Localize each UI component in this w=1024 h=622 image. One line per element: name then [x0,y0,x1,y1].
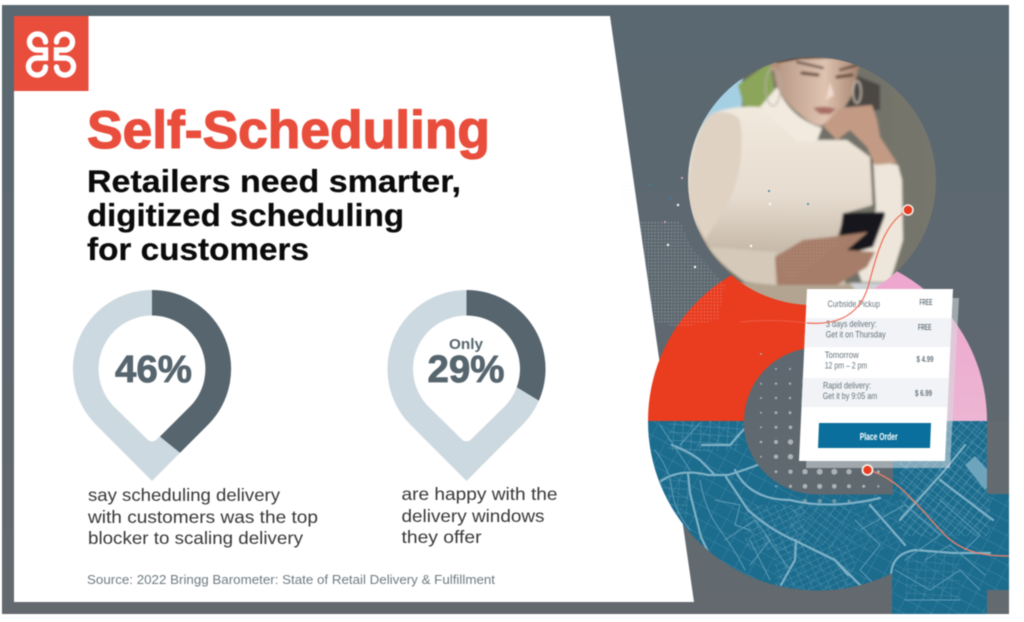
chart: 46% location pin: 46% [115,349,192,391]
subtitle: for customers [87,231,309,267]
text: 29% description [402,484,558,547]
subtitle [87,163,461,267]
logo [14,16,88,91]
delivery options card: Rapid delivery: [823,380,871,392]
chart: 46% location pin [73,290,231,481]
corner blocks [987,421,1009,614]
place order button: Place Order [860,432,898,443]
photo: woman looking at phone [687,56,936,306]
ring: pink segment [872,270,988,422]
delivery options card: Tomorrow [825,350,859,361]
text: 29% description: they offer [402,527,482,547]
source note: Source: 2022 Bringg Barometer: State of Retail Delivery & Fulfillment [87,573,496,587]
delivery options card [799,289,953,461]
delivery options card: 3 days delivery: [826,319,876,330]
subtitle: Retailers need smarter, [87,163,461,199]
subtitle: digitized scheduling [87,197,404,233]
chart: 29% location pin: Only [449,336,484,353]
dot grid [760,353,880,503]
delivery options card: FREE [920,298,933,307]
ring: red segment [647,274,807,422]
delivery options card: 12 pm – 2 pm [825,360,867,372]
text: 46% description [87,485,318,548]
place order button [818,423,931,448]
delivery options card: Get it by 9:05 am [823,391,877,402]
ring inner hole [744,421,893,494]
text: 29% description: delivery windows [402,506,545,526]
card shadow [806,298,959,468]
chart: 29% location pin [387,290,546,481]
delivery route line: upper [740,205,913,323]
delivery options card: Get it on Thursday [826,330,886,341]
text: 46% description: with customers was the top [87,507,318,527]
text: 46% description: say scheduling delivery [88,485,280,505]
title: Self-Scheduling [87,101,490,160]
delivery options card: $ 4.99 [916,355,934,364]
delivery route line: lower [862,465,1009,556]
delivery options card: $ 6.99 [915,389,932,398]
delivery options card: FREE [918,323,932,332]
text: 46% description: blocker to scaling delivery [88,528,303,548]
panel: white content area [14,16,694,602]
delivery options card: Curbside Pickup [828,299,880,310]
city map [640,415,1020,620]
chart: 29% location pin: 29% [428,349,504,391]
text: 29% description: are happy with the [402,484,558,504]
world map dots [620,177,838,328]
